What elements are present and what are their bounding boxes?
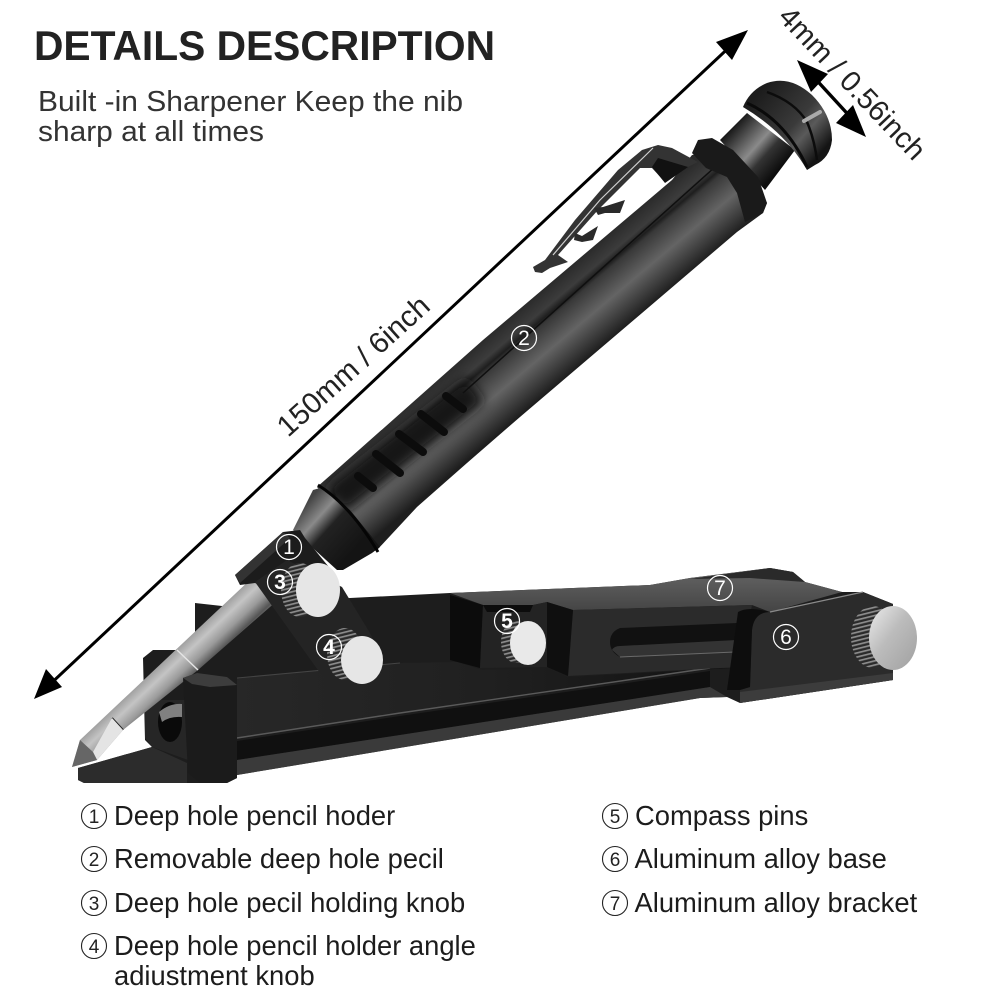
- legend: right column: [602, 800, 918, 918]
- item 4: Deep hole pencil holder angle: [114, 930, 476, 961]
- tag 2: [512, 326, 536, 350]
- item 3: Deep hole pecil holding knob: [114, 887, 465, 918]
- item 6: Aluminum alloy base: [634, 843, 887, 874]
- barrel: [317, 150, 767, 550]
- item 7: Aluminum alloy bracket: [634, 887, 918, 918]
- item 4: [82, 930, 476, 991]
- item 2: 2: [89, 850, 99, 871]
- tag 7: [708, 576, 732, 600]
- adjusting knob: [851, 606, 895, 668]
- item 5: Compass pins: [635, 800, 808, 831]
- collar: [692, 138, 767, 222]
- tag 3: [268, 570, 292, 594]
- tag 4: [316, 634, 342, 660]
- arrow: cap diameter: [797, 60, 866, 137]
- title: DETAILS DESCRIPTION: [34, 22, 495, 69]
- steel tube and nib: [72, 578, 278, 767]
- item 1: Deep hole pencil hoder: [114, 800, 395, 831]
- base end block: [727, 592, 917, 703]
- grip grooves: [358, 396, 463, 488]
- pivot hole: [158, 702, 182, 742]
- slot: [610, 623, 737, 657]
- tag 5: 5: [501, 610, 513, 633]
- pencil holder: [235, 530, 383, 685]
- number tags on product: [268, 326, 798, 660]
- corner post: [183, 673, 237, 783]
- tag 2: 2: [518, 327, 530, 350]
- aluminum alloy bracket: [450, 568, 842, 676]
- body of pencil: [293, 81, 832, 570]
- item 3: 3: [89, 894, 99, 915]
- tag 1: 1: [283, 536, 295, 559]
- pencil holding knob: [281, 563, 319, 617]
- arrow: pencil length: [34, 30, 748, 699]
- item 2: Removable deep hole pecil: [114, 843, 444, 874]
- aluminum alloy base: [78, 568, 893, 783]
- dimension label: length: 150mm / 6inch: [271, 289, 436, 443]
- tag 5: [494, 608, 520, 634]
- subtitle text: sharp at all times: [38, 116, 264, 148]
- neck: [720, 113, 795, 190]
- tag 6: [774, 624, 798, 650]
- tag 7: 7: [714, 577, 726, 600]
- nose cone: [293, 488, 380, 570]
- tag 4: 4: [323, 636, 335, 659]
- pin block: [480, 602, 547, 668]
- grip shading: [335, 390, 475, 500]
- dimension label: diameter: 4mm / 0.56inch: [772, 1, 932, 167]
- item 4: 4: [89, 937, 100, 958]
- angle plate: [255, 560, 382, 685]
- item 4: adiustment knob: [114, 960, 315, 991]
- tag 3: 3: [274, 571, 286, 594]
- item 7: 7: [610, 894, 620, 915]
- cap: [743, 81, 832, 170]
- barrel seam: [463, 167, 715, 393]
- angle adjustment knob: [327, 628, 363, 680]
- item 6: 6: [610, 850, 620, 871]
- clip: [533, 145, 698, 273]
- product: marking gauge: [72, 81, 917, 783]
- legend: left column: [82, 800, 476, 991]
- item 1: 1: [89, 807, 99, 828]
- compass pin knob: [501, 621, 546, 665]
- item 5: 5: [610, 807, 620, 828]
- tag 6: 6: [780, 626, 792, 649]
- subtitle text: Built -in Sharpener Keep the nib: [38, 86, 463, 118]
- tag 1: [276, 534, 302, 560]
- slotted front face: [568, 605, 752, 676]
